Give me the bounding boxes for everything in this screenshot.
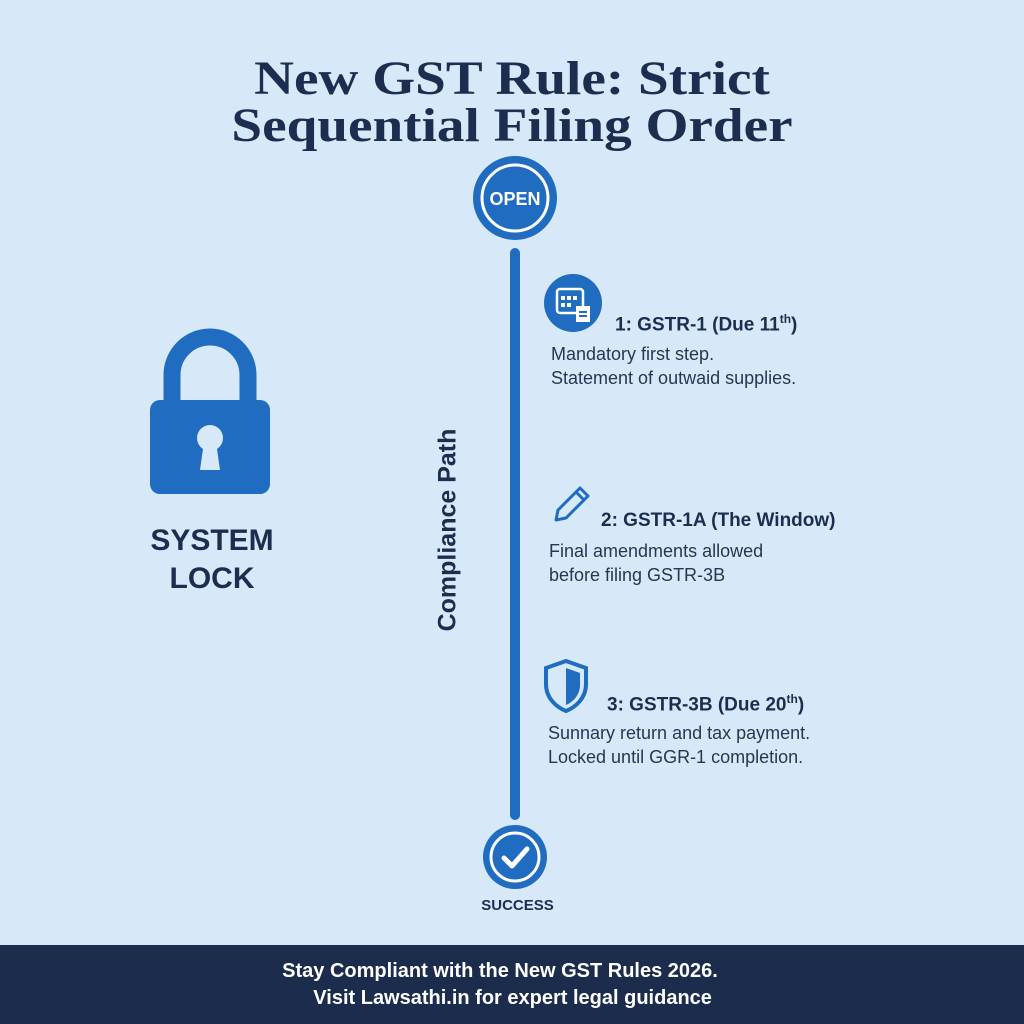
step 2: Final amendments allowed: [549, 541, 763, 561]
open node: [473, 156, 557, 240]
step 1: Mandatory first step.: [551, 344, 714, 364]
icon: shield: [544, 658, 588, 714]
step 1: Statement of outwaid supplies.: [551, 368, 796, 388]
step 1: 1: GSTR-1 (Due 11th): [615, 312, 797, 335]
step 3: Locked until GGR-1 completion.: [548, 747, 803, 767]
success label: SUCCESS: [481, 897, 554, 914]
title: [231, 52, 793, 152]
title: Sequential Filing Order: [231, 99, 793, 152]
footer banner: Stay Compliant with the New GST Rules 2026.: [282, 960, 718, 982]
step 1: [544, 274, 797, 388]
footer banner: Visit Lawsathi.in for expert legal guidance: [313, 987, 712, 1009]
icon: pencil: [554, 486, 590, 522]
success node: [483, 825, 547, 889]
title: New GST Rule: Strict: [254, 52, 770, 105]
step 3: Sunnary return and tax payment.: [548, 723, 810, 743]
footer banner: [0, 945, 1024, 1024]
vertical label: compliance path: Compliance Path: [434, 429, 462, 631]
step 3: 3: GSTR-3B (Due 20th): [607, 692, 804, 715]
step 2: before filing GSTR-3B: [549, 565, 725, 585]
open node: OPEN: [489, 189, 541, 209]
lock label: [150, 524, 274, 595]
step 3: [544, 658, 810, 767]
icon: system lock: [150, 328, 270, 494]
timeline line: [510, 248, 520, 820]
icon: calendar: [544, 274, 602, 332]
step 2: [549, 486, 836, 585]
lock label: SYSTEM: [150, 524, 274, 557]
lock label: LOCK: [170, 562, 254, 595]
step 2: 2: GSTR-1A (The Window): [601, 510, 836, 531]
